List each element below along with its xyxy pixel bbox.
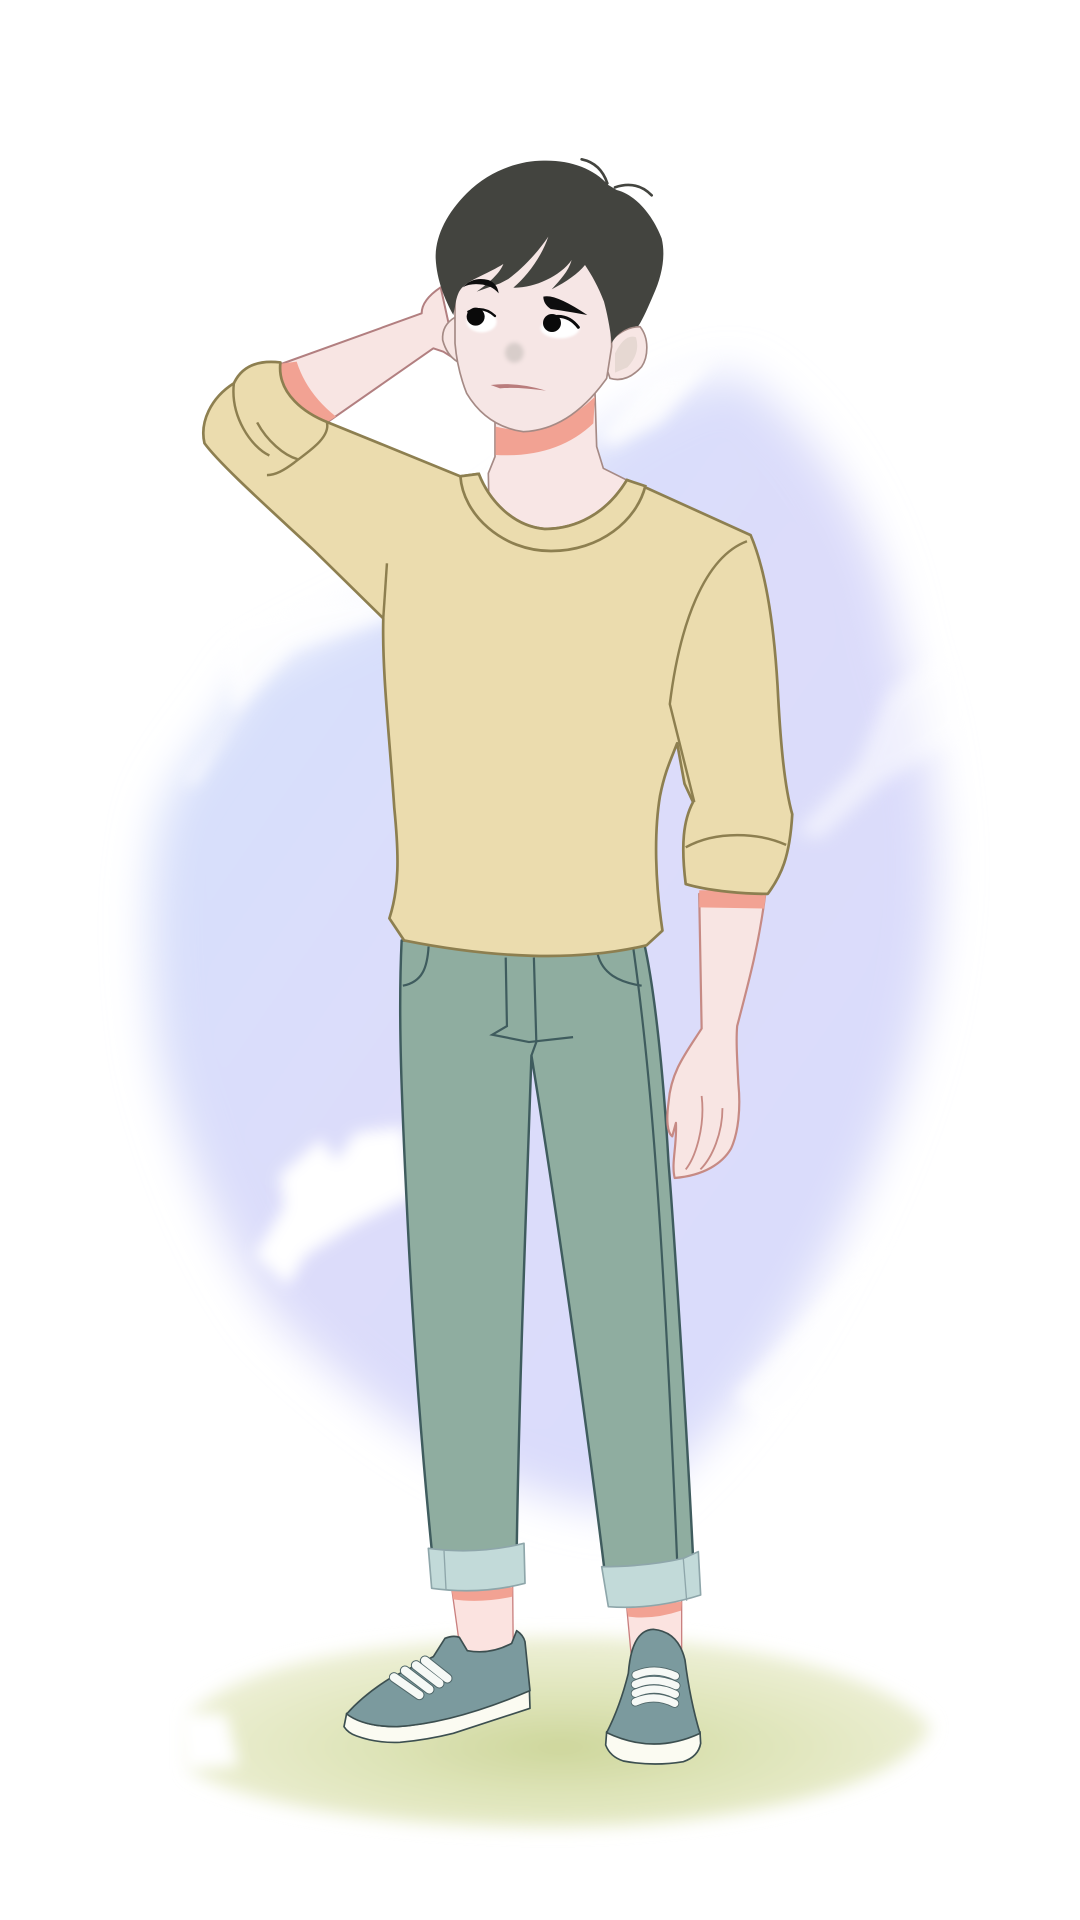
trouser seams [403, 947, 677, 1561]
figure: lowered arm and hand [667, 890, 767, 1178]
background: lavender watercolor blob [150, 355, 967, 1512]
finger lines [686, 1096, 722, 1169]
stray hair strands [582, 159, 652, 195]
figure: head [436, 159, 663, 432]
figure: neck [488, 393, 627, 563]
right trouser cuff [602, 1552, 701, 1607]
right eyebrow [543, 296, 587, 315]
right eye [541, 314, 579, 338]
wrist shadow [279, 362, 336, 423]
right ankle [627, 1600, 682, 1660]
figure: raised arm and hand [278, 287, 457, 423]
left eyebrow [463, 279, 499, 293]
figure: yellow sweater [203, 362, 792, 956]
left ear [443, 317, 457, 362]
left eye [467, 308, 497, 332]
figure: cuffs and ankles [344, 1543, 701, 1764]
left trouser cuff [428, 1543, 525, 1591]
right shoe [606, 1629, 701, 1764]
mouth [491, 384, 546, 391]
sweater sleeve and fold lines [233, 383, 786, 847]
left shoe [344, 1631, 530, 1742]
sweater collar [460, 474, 645, 551]
figure: trousers [400, 940, 693, 1573]
nose [505, 343, 524, 363]
wrist shadow [699, 890, 767, 909]
ground: olive green watercolor shadow [178, 1637, 931, 1827]
face [455, 230, 612, 432]
right ear [605, 327, 647, 379]
left ankle [452, 1585, 513, 1663]
hair [436, 161, 663, 343]
